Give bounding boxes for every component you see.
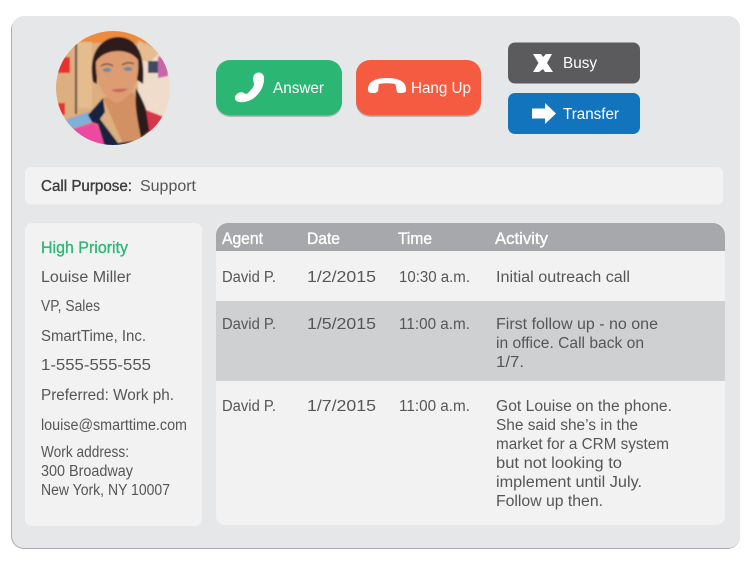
icon: handset down: [368, 78, 406, 93]
table row 1: David P.: [222, 269, 276, 286]
panel: call purpose: [25, 167, 723, 204]
table row 3: but not looking to: [496, 455, 622, 472]
table header: [216, 223, 725, 251]
table row 3: 1/7/2015: [307, 398, 376, 415]
work address: 300 Broadway: [41, 463, 133, 480]
panel: contact details: [25, 223, 202, 526]
icon: arrow: [532, 103, 556, 124]
table row 2: 1/7.: [496, 354, 524, 371]
contact title: VP, Sales: [41, 298, 100, 315]
table row 2: 11:00 a.m.: [399, 316, 470, 333]
table row 3: 11:00 a.m.: [399, 398, 470, 415]
preferred contact: Preferred: Work ph.: [41, 387, 174, 404]
table row 1: [222, 269, 630, 286]
face: [96, 51, 138, 103]
table row 1: Initial outreach call: [496, 269, 630, 286]
priority heading: High Priority: [41, 239, 129, 257]
icon: x: [533, 54, 553, 72]
table header: Time: [398, 230, 432, 248]
table row 3: She said she’s in the: [496, 417, 638, 434]
phone number: 1-555-555-555: [41, 357, 151, 374]
table row 2: [216, 301, 725, 381]
button: transfer: [508, 93, 640, 134]
table row 3: Got Louise on the phone.: [496, 398, 672, 415]
email: louise@smarttime.com: [41, 417, 187, 434]
table row 2: 1/5/2015: [307, 316, 376, 333]
button: answer: [216, 60, 342, 117]
table row 3: David P.: [222, 398, 276, 415]
shirt: [66, 112, 102, 134]
icon: phone: [235, 73, 264, 102]
braid: [135, 88, 151, 138]
table header: Agent: [222, 230, 263, 248]
company: SmartTime, Inc.: [41, 328, 146, 345]
table row 3: [222, 398, 672, 510]
hair: [92, 37, 143, 84]
work address: Work address:: [41, 444, 129, 461]
table row 2: First follow up - no one: [496, 316, 658, 333]
call purpose value: Support: [140, 178, 197, 195]
table row 1: 10:30 a.m.: [399, 269, 470, 286]
hang up label: Hang Up: [411, 80, 471, 97]
chest and neck: [103, 92, 142, 144]
table row 3: Follow up then.: [496, 493, 603, 510]
table row 2: David P.: [222, 316, 276, 333]
table row 3: implement until July.: [496, 474, 642, 491]
contact name: Louise Miller: [41, 269, 131, 286]
transfer label: Transfer: [563, 106, 620, 123]
avatar photo: [54, 29, 172, 150]
button: busy: [508, 42, 640, 84]
busy label: Busy: [563, 55, 597, 72]
call purpose label: Call Purpose:: [41, 178, 132, 195]
work address: [41, 444, 170, 499]
answer label: Answer: [273, 80, 325, 97]
button: hang up: [356, 60, 481, 117]
panel: activity table: [216, 223, 725, 525]
work address: New York, NY 10007: [41, 482, 170, 499]
table row 3: market for a CRM system: [496, 436, 669, 453]
table row 2: in office. Call back on: [496, 335, 644, 352]
table header: Date: [307, 230, 340, 248]
table row 1: 1/2/2015: [307, 269, 376, 286]
table header: Activity: [495, 230, 549, 248]
